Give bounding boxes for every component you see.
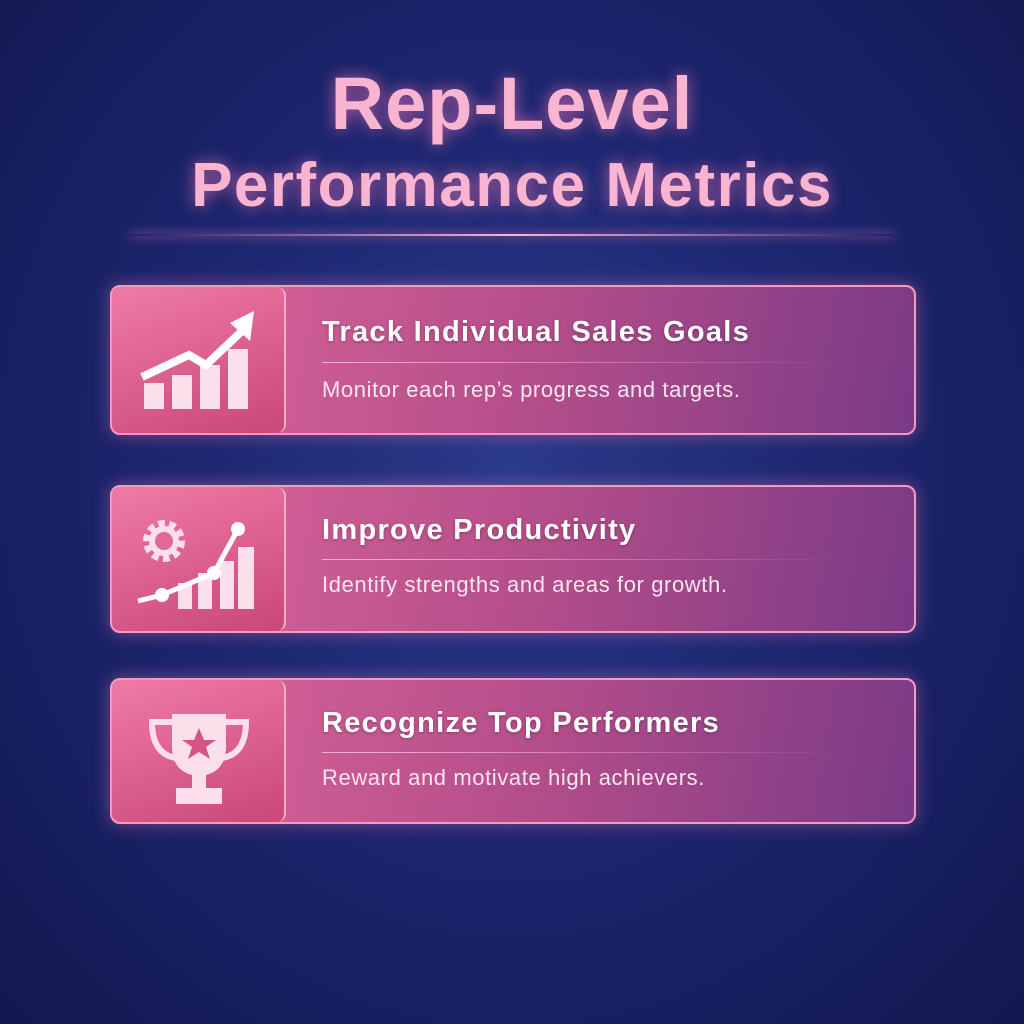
icon: gear chart xyxy=(112,487,286,631)
panel: productivity: Identify strengths and areas for growth. xyxy=(322,572,728,597)
panel: top performers: Reward and motivate high achievers. xyxy=(322,765,705,790)
title xyxy=(183,62,839,220)
panel: productivity: Improve Productivity xyxy=(322,514,636,546)
panel: productivity xyxy=(110,485,916,633)
panel: track goals: Monitor each rep’s progress and targets. xyxy=(322,377,741,402)
icon: chart arrow xyxy=(112,287,286,433)
panel: top performers xyxy=(110,678,916,824)
title: Rep-Level xyxy=(331,62,693,145)
icon: trophy xyxy=(112,680,286,822)
panel: track goals xyxy=(110,285,916,435)
glow divider xyxy=(130,234,894,236)
panel: top performers: Recognize Top Performers xyxy=(322,707,720,739)
title: Performance Metrics xyxy=(191,151,833,220)
panel: track goals: Track Individual Sales Goals xyxy=(322,316,750,348)
